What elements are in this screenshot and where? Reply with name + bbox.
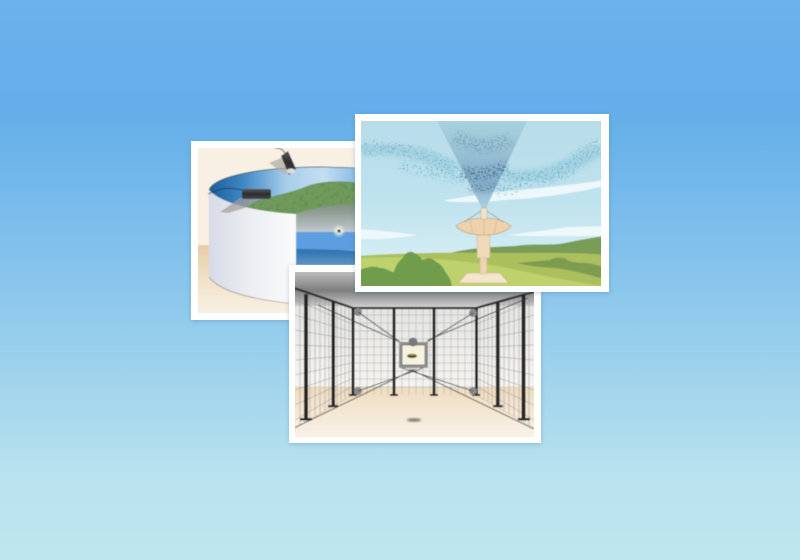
ceiling: [295, 272, 534, 307]
back wall: [292, 306, 537, 388]
projector: side: [208, 188, 271, 213]
right bushes: [517, 258, 604, 279]
floor shadow: [407, 418, 421, 422]
left bushes: [361, 251, 452, 286]
base plate: [458, 273, 509, 283]
white clouds: [358, 180, 604, 239]
dense swarm in beam: [455, 135, 510, 189]
panel: cylindrical projection arena: [191, 141, 365, 320]
cylinder rim line: [209, 167, 362, 190]
posts: [300, 294, 530, 420]
insect target: [334, 226, 344, 236]
light beam: [437, 121, 527, 208]
frame rails: [294, 288, 534, 308]
far hills: [452, 236, 601, 256]
left wall grid: [295, 285, 353, 430]
swarm dots: [361, 147, 601, 190]
lower post: [480, 256, 487, 274]
radar dish tower: [456, 208, 511, 283]
wall base line: [209, 277, 296, 304]
projector: top: [269, 148, 296, 175]
upper post: [477, 234, 490, 258]
dish: [456, 218, 511, 235]
pulleys: [354, 308, 477, 395]
panel: flight tunnel with motion-controlled target: [289, 265, 541, 443]
wall and floor edges: [295, 387, 534, 428]
cables: [294, 298, 534, 429]
backdrop: [196, 146, 360, 315]
floor: [292, 387, 537, 440]
feed and struts: [464, 211, 503, 222]
target cage: [399, 338, 428, 368]
sky: [358, 118, 604, 256]
back wall grid: [353, 308, 476, 395]
panel: radar dish and insect swarm: [355, 114, 609, 292]
swarm haze: [361, 148, 601, 178]
right wall grid: [477, 300, 534, 425]
cylinder interior scene: [209, 167, 362, 265]
fields: [361, 252, 601, 286]
white cylinder wall: [209, 190, 296, 304]
front meadow: [361, 258, 598, 286]
